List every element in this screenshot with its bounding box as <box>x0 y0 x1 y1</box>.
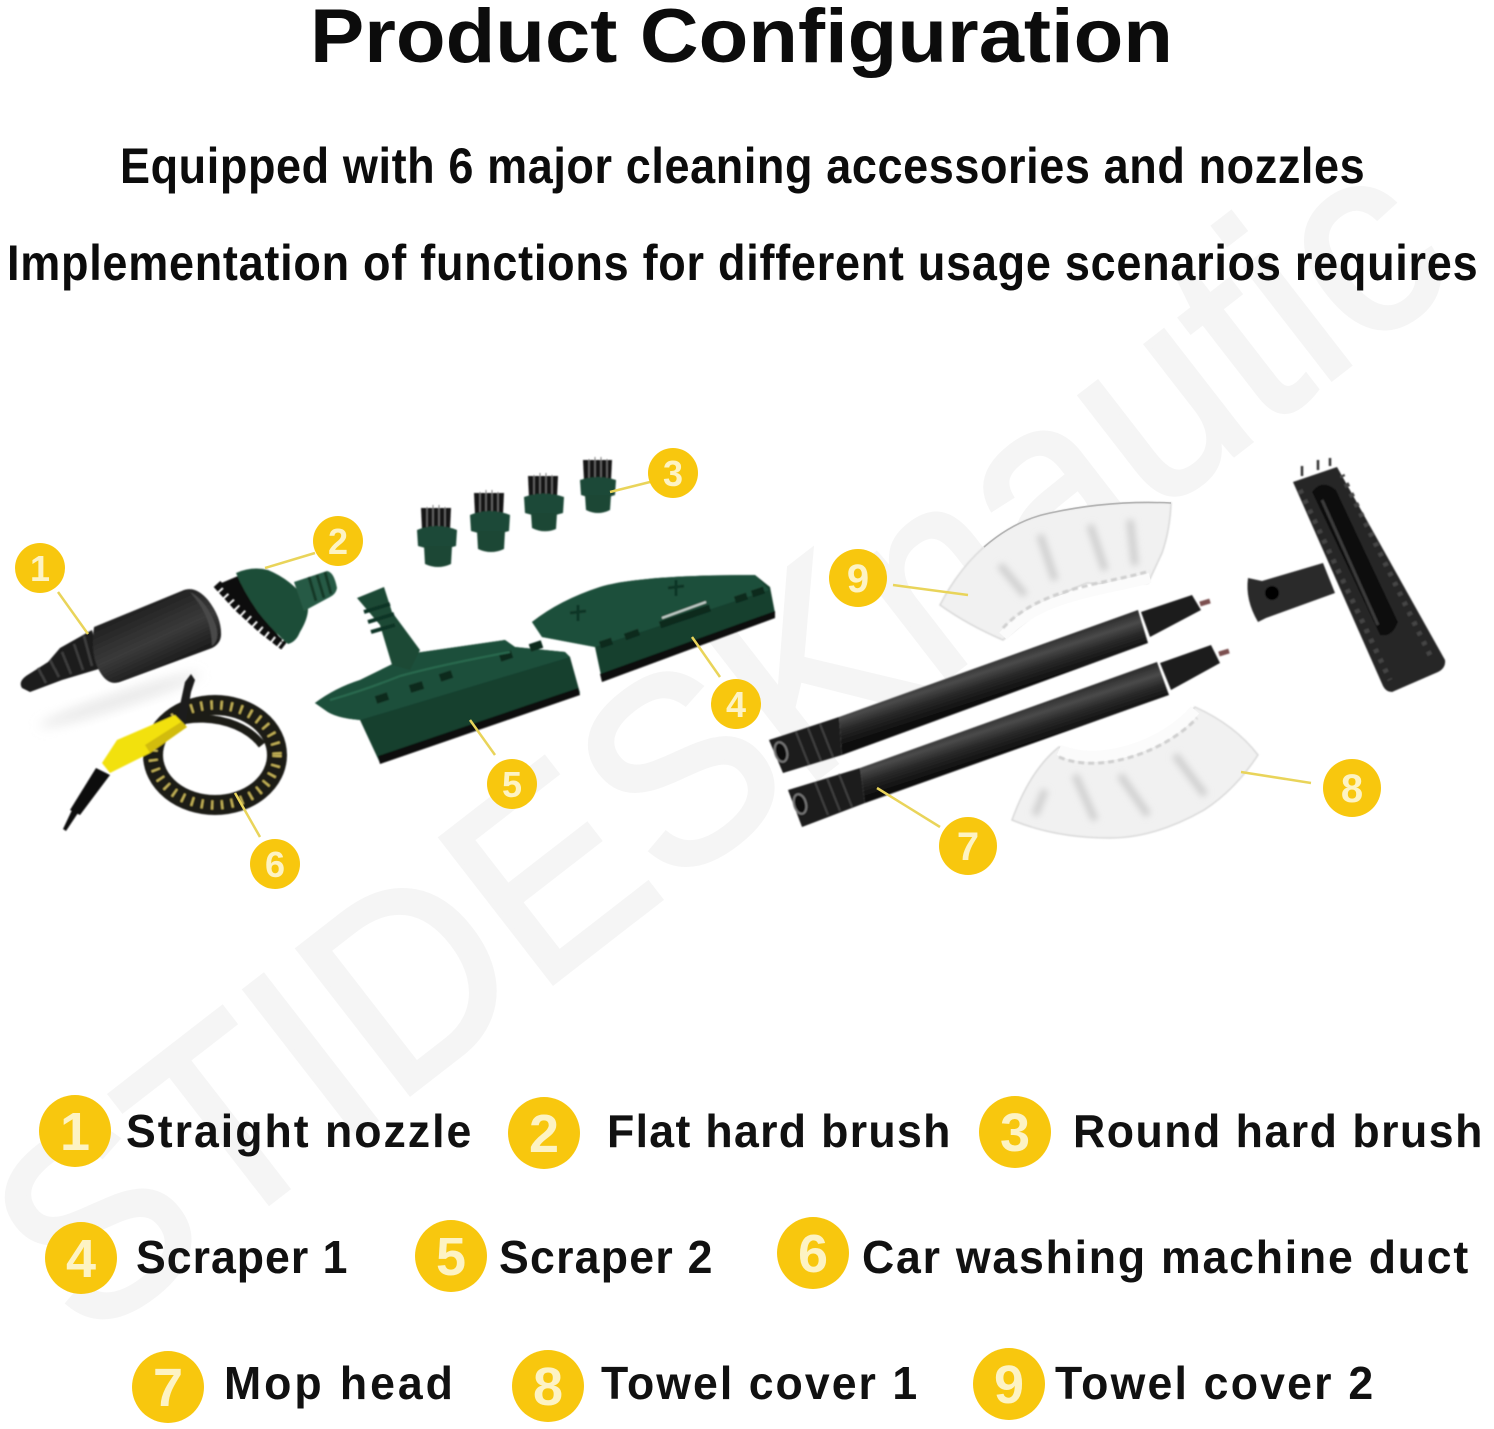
badge 1: 1 <box>30 548 50 589</box>
badge 1 <box>15 543 65 593</box>
legend item 1 <box>39 1095 471 1167</box>
legend item 7: Mop head <box>224 1357 453 1409</box>
item 4: scraper 1 <box>532 575 775 682</box>
legend item 3: 3 <box>1000 1103 1030 1163</box>
badge 3 <box>648 448 698 498</box>
badge 2: 2 <box>328 521 348 562</box>
badge 2 <box>313 516 363 566</box>
legend item 4: Scraper 1 <box>136 1231 347 1283</box>
legend item 8: Towel cover 1 <box>601 1357 917 1409</box>
legend item 5: 5 <box>436 1227 466 1287</box>
legend item 4 <box>45 1222 347 1294</box>
legend item 9: Towel cover 2 <box>1055 1357 1373 1409</box>
legend item 4: 4 <box>66 1229 96 1289</box>
legend item 3: Round hard brush <box>1073 1105 1482 1157</box>
legend item 8: 8 <box>533 1357 563 1417</box>
legend item 2: 2 <box>529 1104 559 1164</box>
legend item 6: Car washing machine duct <box>862 1231 1468 1283</box>
product diagram <box>15 448 1445 889</box>
badge 8: 8 <box>1341 767 1363 811</box>
badge 4: 4 <box>726 684 746 725</box>
badge 4 <box>711 679 761 729</box>
legend <box>39 1095 1482 1423</box>
badge 9 <box>829 549 887 607</box>
legend item 1: Straight nozzle <box>126 1105 471 1157</box>
item 3: round hard brushes <box>417 457 616 567</box>
badge 9: 9 <box>847 557 869 601</box>
badge 3: 3 <box>663 453 683 494</box>
subheading line 2: Implementation of functions for different usage scenarios requires <box>7 236 1478 292</box>
legend item 5: Scraper 2 <box>499 1231 712 1283</box>
item 5: scraper 2 <box>315 587 580 764</box>
badge 7: 7 <box>957 825 979 869</box>
legend item 7 <box>132 1351 453 1423</box>
legend item 8 <box>512 1350 917 1422</box>
subheading line 1: Equipped with 6 major cleaning accessories and nozzles <box>120 139 1365 195</box>
item 1: straight nozzle <box>21 589 221 733</box>
leader lines <box>58 482 1311 837</box>
item 8: towel cover 1 <box>1012 707 1258 838</box>
legend item 3 <box>979 1096 1482 1168</box>
legend item 1: 1 <box>60 1102 90 1162</box>
legend item 9 <box>973 1348 1373 1420</box>
badge 8 <box>1323 759 1381 817</box>
item 2: flat hard brush <box>217 569 337 646</box>
legend item 6 <box>777 1217 1468 1289</box>
legend item 9: 9 <box>994 1355 1024 1415</box>
badge 6 <box>250 839 300 889</box>
legend item 6: 6 <box>798 1224 828 1284</box>
badge 6: 6 <box>265 844 285 885</box>
legend item 7: 7 <box>153 1358 183 1418</box>
item 6: car washing machine duct <box>63 674 277 831</box>
item 7: mop head poles <box>769 458 1445 827</box>
legend item 5 <box>415 1220 712 1292</box>
legend item 2 <box>508 1097 950 1169</box>
item 9: towel cover 2 <box>940 502 1171 640</box>
legend item 2: Flat hard brush <box>607 1105 950 1157</box>
badge 5 <box>487 759 537 809</box>
badge 7 <box>939 817 997 875</box>
badge 5: 5 <box>502 764 522 805</box>
